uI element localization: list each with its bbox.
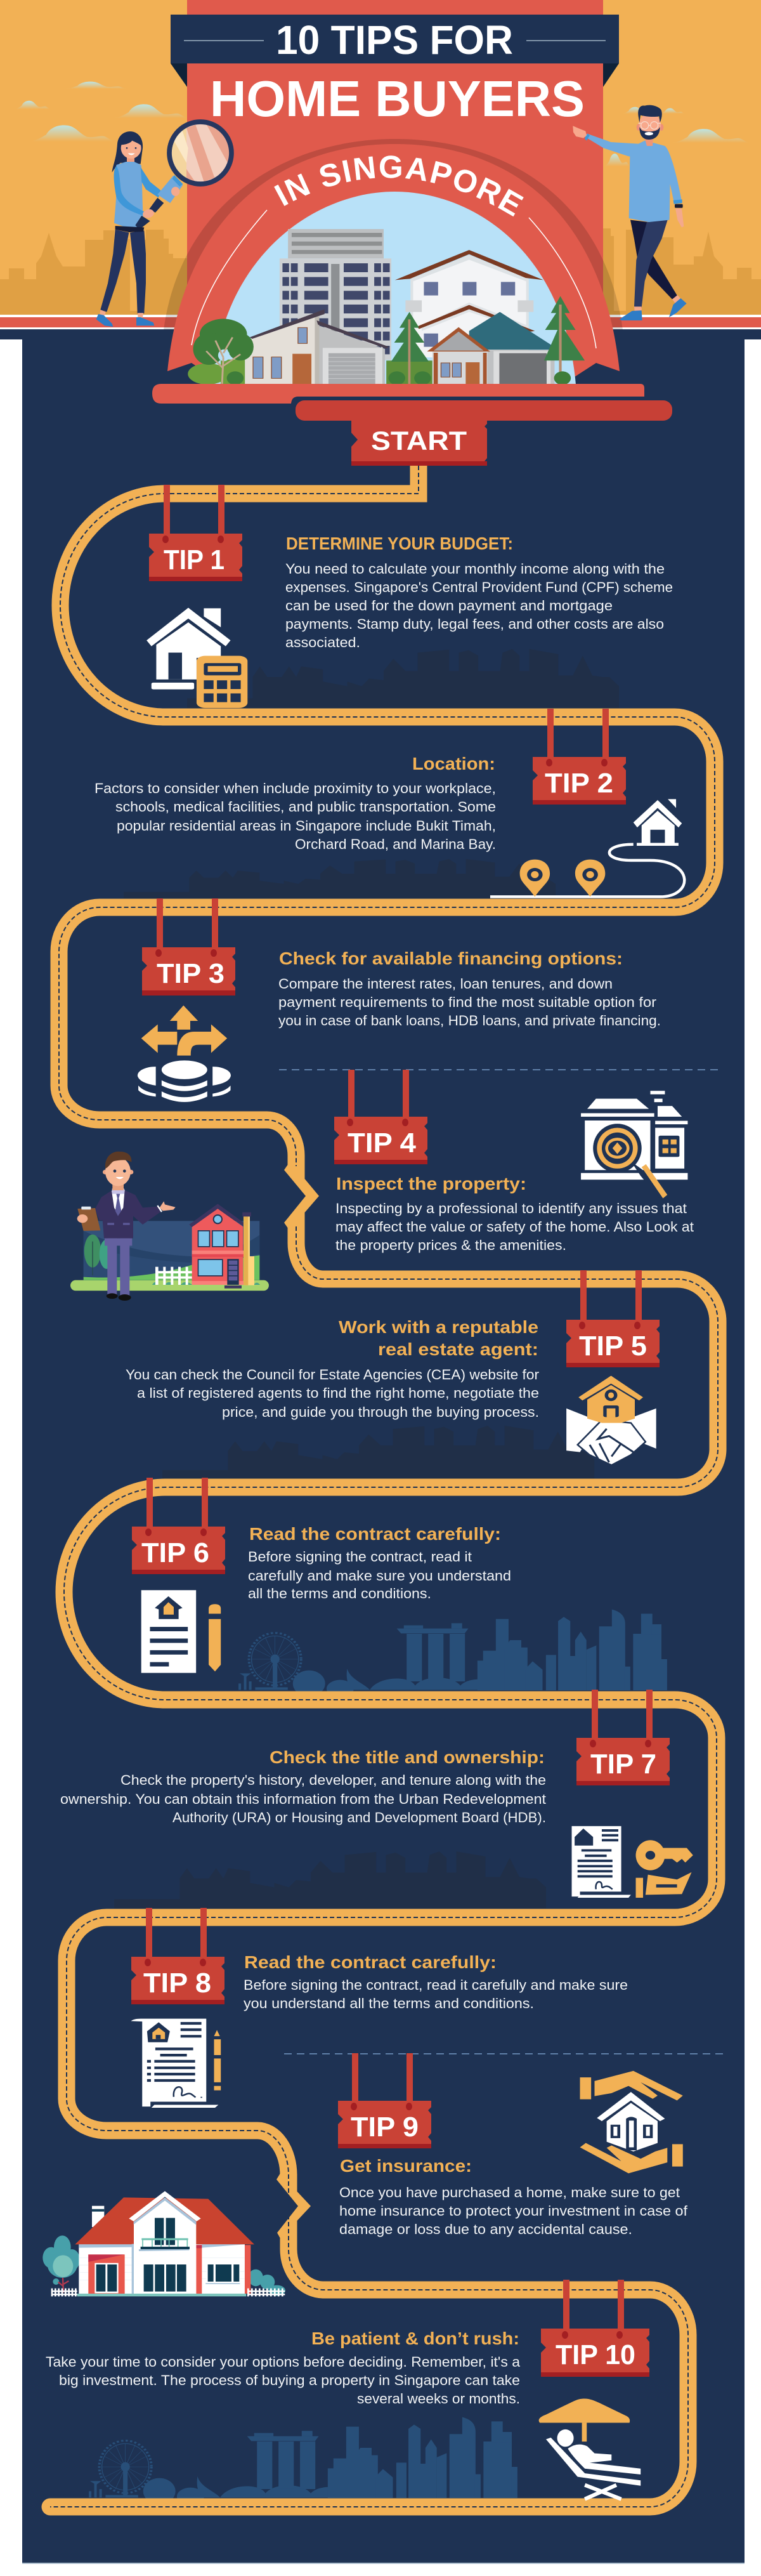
tip 10 sign: TIP 10 <box>556 2339 635 2370</box>
title line 2: HOME BUYERS <box>210 70 585 127</box>
tip 8 sign: TIP 8 <box>143 1968 211 1999</box>
icon: arrows and coins <box>138 1006 231 1102</box>
tip 3 sign: TIP 3 <box>157 958 224 989</box>
icon: contract and pencil <box>141 1590 221 1673</box>
body text: ownership. You can obtain this information from the Urban Redevelopment <box>60 1791 546 1807</box>
body text <box>278 976 661 1028</box>
divider <box>279 1069 719 1070</box>
tip 4 sign: TIP 4 <box>348 1127 417 1159</box>
tower block <box>280 229 391 360</box>
icon: signed document and pencil <box>131 2019 221 2108</box>
tip 4 sign <box>334 1070 427 1164</box>
tip 5 sign: TIP 5 <box>579 1331 647 1362</box>
body text <box>339 2185 688 2237</box>
body text <box>244 1977 628 2011</box>
heading: Check for available financing options: <box>279 949 623 968</box>
start sign: START <box>371 426 467 456</box>
body text: you understand all the terms and conditions. <box>244 1995 534 2011</box>
body text: payment requirements to find the most suitable option for <box>278 994 656 1010</box>
woman with magnifying glass <box>96 119 235 327</box>
body text: Factors to consider when include proximity to your workplace, <box>94 780 496 796</box>
body text <box>126 1367 539 1420</box>
tip 6 sign <box>132 1478 225 1574</box>
tip 8 sign <box>131 1908 224 2004</box>
icon: house, route and pins <box>490 799 684 897</box>
body text <box>94 780 496 852</box>
body text <box>335 1200 694 1253</box>
title line 1: 10 TIPS FOR <box>276 17 513 63</box>
icon: house and calculator <box>146 608 247 708</box>
tip 1 sign <box>149 485 242 581</box>
white two storey house <box>395 250 543 357</box>
panel: tip 3 <box>138 898 661 1102</box>
panel: tip 8 <box>131 1908 628 2108</box>
panel: tip 5 <box>126 1270 660 1465</box>
body text <box>285 561 673 650</box>
body text: Before signing the contract, read it carefully and make sure <box>244 1977 628 1993</box>
body text: carefully and make sure you understand <box>248 1568 511 1584</box>
body text: Once you have purchased a home, make sure to get <box>339 2185 680 2200</box>
body text: payments. Stamp duty, legal fees, and other costs are also <box>285 616 664 632</box>
body text: a list of registered agents to find the right home, negotiate the <box>137 1385 539 1401</box>
tip 7 sign: TIP 7 <box>590 1749 656 1780</box>
heading: DETERMINE YOUR BUDGET: <box>286 534 513 553</box>
city skylines, dark <box>114 649 619 1909</box>
body text: Take your time to consider your options before deciding. Remember, it's a <box>46 2354 521 2370</box>
body text: all the terms and conditions. <box>248 1586 431 1601</box>
icon: handshake and house <box>566 1376 656 1465</box>
thin arch lines <box>192 210 596 348</box>
magnifier lens <box>171 124 230 181</box>
tip 2 sign <box>533 709 626 805</box>
tip 5 sign <box>566 1270 660 1367</box>
body text: you in case of bank loans, HDB loans, and private financing. <box>278 1013 661 1028</box>
red arch <box>167 144 620 387</box>
body text: may affect the value or safety of the home. Also Look at <box>335 1219 694 1235</box>
body text: can be used for the down payment and mortgage <box>285 598 613 614</box>
tip 10 sign <box>541 2280 649 2377</box>
clouds <box>15 82 749 166</box>
icon: title deed and key <box>572 1826 693 1898</box>
trees and bushes <box>188 296 585 385</box>
body text: popular residential areas in Singapore include Bukit Timah, <box>117 818 496 834</box>
body text: Orchard Road, and Marina Bay. <box>295 836 496 852</box>
heading: Read the contract carefully: <box>249 1524 501 1544</box>
body text: Compare the interest rates, loan tenures, and down <box>278 976 613 992</box>
body text: Inspecting by a professional to identify any issues that <box>335 1200 687 1216</box>
body text <box>248 1549 511 1601</box>
body text: expenses. Singapore's Central Provident Fund (CPF) scheme <box>285 579 673 595</box>
sky inside arch <box>212 192 576 384</box>
heading: Inspect the property: <box>336 1174 526 1193</box>
base bars <box>152 384 644 404</box>
body text <box>46 2354 521 2407</box>
navy title ribbon <box>171 15 619 87</box>
heading: Be patient & don’t rush: <box>311 2329 519 2348</box>
tip 9 sign: TIP 9 <box>351 2112 419 2143</box>
tip 2 sign: TIP 2 <box>545 768 613 799</box>
left garage house <box>245 309 389 384</box>
city skyline left <box>0 230 188 315</box>
heading: real estate agent: <box>378 1339 538 1359</box>
tip 7 sign <box>576 1690 670 1785</box>
curved subtitle: IN SINGAPORE <box>274 155 524 217</box>
icon: person relaxing under umbrella <box>539 2398 641 2499</box>
red roof house <box>42 2191 285 2296</box>
body text: the property prices & the amenities. <box>335 1237 566 1253</box>
divider <box>284 2053 723 2054</box>
body text: damage or loss due to any accidental cause. <box>339 2221 632 2237</box>
red centre band <box>187 0 603 343</box>
right teal roof house <box>427 312 559 384</box>
panel: header <box>0 0 761 404</box>
winding road <box>50 463 718 2507</box>
body text: Before signing the contract, read it <box>248 1549 472 1565</box>
tip 1 sign: TIP 1 <box>164 544 224 575</box>
body text: schools, medical facilities, and public transportation. Some <box>115 799 496 815</box>
heading: Check the title and ownership: <box>270 1747 545 1767</box>
body text: You need to calculate your monthly income along with the <box>285 561 665 577</box>
Singapore skyline, tip 10 <box>89 2417 517 2506</box>
panel: tip 7 <box>60 1690 693 1898</box>
heading: Work with a reputable <box>339 1317 538 1337</box>
body text: several weeks or months. <box>357 2391 520 2407</box>
heading: Location: <box>412 754 495 773</box>
body text: associated. <box>285 634 360 650</box>
panel: tip 2 <box>94 709 684 897</box>
city skyline right <box>603 228 761 315</box>
start sign <box>296 400 672 466</box>
icon: house inspection <box>581 1091 687 1199</box>
heading <box>339 1317 538 1359</box>
heading: Get insurance: <box>340 2156 472 2176</box>
icon: hands protecting house <box>580 2071 683 2173</box>
body text: big investment. The process of buying a property in Singapore can take <box>59 2372 520 2388</box>
panel: tip 1 <box>146 485 673 708</box>
body text: price, and guide you through the buying process. <box>222 1404 539 1420</box>
panel: tip 6 <box>132 1478 511 1673</box>
panel: tip 9 <box>42 2053 688 2296</box>
body text: Check the property's history, developer, and tenure along with the <box>120 1772 546 1788</box>
body text <box>60 1772 546 1825</box>
tip 3 sign <box>142 898 235 996</box>
heading: Read the contract carefully: <box>244 1952 497 1972</box>
tip 9 sign <box>338 2053 431 2148</box>
panel: tip 4 <box>70 1070 694 1301</box>
Singapore skyline, tip 6 <box>238 1610 667 1698</box>
panel: tip 10 <box>46 2280 649 2499</box>
agent with house <box>70 1152 269 1301</box>
body text: You can check the Council for Estate Agencies (CEA) website for <box>126 1367 539 1383</box>
man pointing <box>573 105 687 320</box>
arch shadow <box>164 139 623 330</box>
tip 6 sign: TIP 6 <box>141 1537 209 1568</box>
body text: Authority (URA) or Housing and Development Board (HDB). <box>172 1810 546 1825</box>
body text: home insurance to protect your investment in case of <box>339 2203 688 2219</box>
